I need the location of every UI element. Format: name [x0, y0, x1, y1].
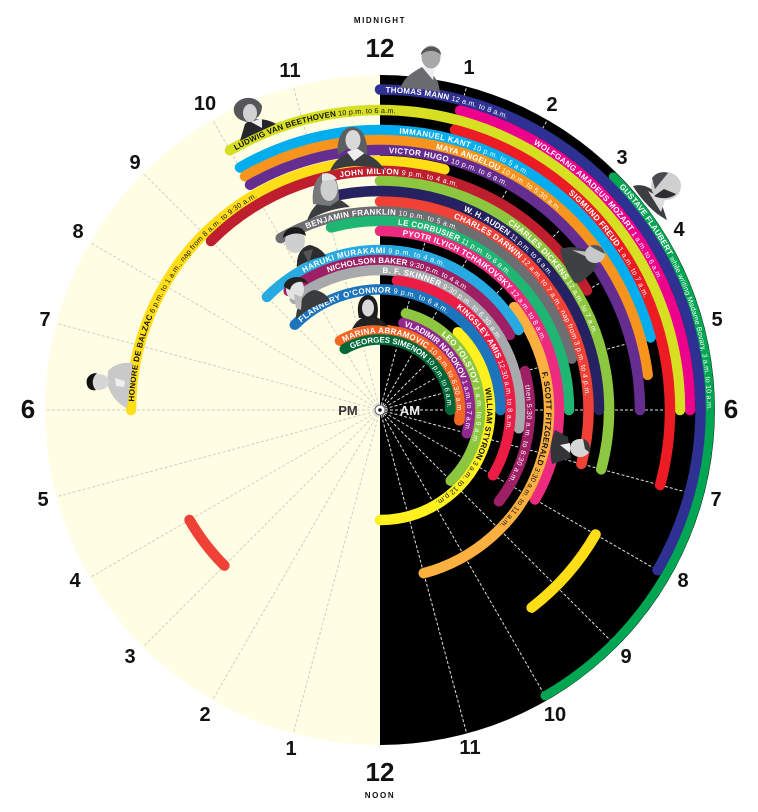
arc: Nicholson Baker second sleep: then 5:30 a.m. to 8:30 a.m.: [509, 384, 532, 481]
clock face: AM half: [380, 75, 715, 745]
arc: Le Corbusier: LE CORBUSIER 11 p.m. to 6 a.m.: [398, 219, 508, 275]
hour labels: 8: [72, 221, 84, 243]
arc: Kingsley Amis: [392, 275, 516, 480]
arc: Nicholson Baker: NICHOLSON BAKER 9:30 p.m. to 4 a.m.: [326, 258, 466, 290]
hour labels: 4: [673, 219, 685, 241]
arc: Immanuel Kant: IMMANUEL KANT 10 p.m. to 5 a.m.: [400, 128, 527, 175]
hour labels: 9: [129, 152, 141, 174]
portrait: Marina Abramovic: [352, 295, 388, 329]
arc: F. Scott Fitzgerald: F. SCOTT FITZGERALD 3:30 a.m. to 11 a.m.: [500, 372, 552, 526]
hour labels: 9: [620, 646, 632, 668]
hour labels: 3: [616, 147, 628, 169]
hour labels: 6: [21, 394, 35, 424]
arc: Leo Tolstoy: LEO TOLSTOY 1 a.m. to 9 a.m.: [442, 330, 482, 442]
portrait: Flannery O'Connor: [284, 277, 330, 319]
portrait: Thomas Mann: [401, 46, 441, 92]
portrait: Haruki Murakami: [283, 227, 326, 267]
arc: Benjamin Franklin: [276, 206, 577, 364]
hour labels: 5: [711, 309, 723, 331]
arc: Haruki Murakami: HARUKI MURAKAMI 9 p.m. to 4 a.m.: [302, 248, 444, 272]
arc: F. Scott Fitzgerald: [418, 302, 554, 578]
arc: B. F. Skinner: [290, 264, 526, 434]
arc: Georges Simenon: GEORGES SIMENON 10 p.m. to 6 a.m.: [350, 336, 452, 407]
hour labels: 8: [677, 570, 689, 592]
arc: Wolfgang Amadeus Mozart: [454, 105, 696, 416]
arc: William Styron: WILLIAM STYRON 3 a.m. to 12 p.m.: [436, 387, 493, 503]
portrait: Honoré de Balzac: [87, 363, 133, 408]
heading: noon: NOON: [365, 791, 395, 800]
portrait: F. Scott Fitzgerald: [551, 430, 590, 464]
arc: Immanuel Kant: [234, 124, 656, 343]
arc: Leo Tolstoy: [400, 308, 486, 486]
portrait: Charles Dickens: [560, 245, 605, 283]
arc: Honoré de Balzac: [126, 156, 450, 416]
arc: Sigmund Freud: [450, 124, 676, 490]
hour labels: 10: [544, 704, 566, 726]
arc: B. F. Skinner: B. F. SKINNER 9:30 p.m. to 6:30 a.m.: [382, 268, 500, 340]
arc: Victor Hugo: [244, 144, 646, 416]
hour labels: 12: [366, 757, 394, 787]
clock center: [375, 405, 385, 415]
arc: Thomas Mann: THOMAS MANN 12 a.m. to 8 a.m.: [386, 87, 506, 118]
hour labels: 12: [366, 33, 394, 63]
arc: Thomas Mann: [374, 84, 706, 576]
arc: Pyotr Ilyich Tchaikovsky: [374, 226, 564, 505]
hour labels: 7: [39, 309, 51, 331]
label: PM: PM: [338, 403, 358, 418]
arc: Vladimir Nabokov: VLADIMIR NABOKOV 1 a.m. to 7 a.m.: [406, 321, 472, 430]
arc: Darwin nap: [190, 520, 224, 566]
arc: Pyotr Ilyich Tchaikovsky: PYOTR ILYICH TCHAIKOVSKY 12 a.m. to 8 a.m.: [402, 230, 544, 340]
hour labels: 11: [459, 737, 481, 759]
arc: Gustave Flaubert: [540, 172, 714, 700]
arc: Sigmund Freud: SIGMUND FREUD 1 a.m. to 7 a.m.: [569, 190, 646, 298]
arc: Nicholson Baker second sleep: [494, 366, 536, 506]
hour labels: 11: [279, 60, 301, 82]
arc: John Milton: [206, 166, 592, 296]
arc: Balzac nap: [532, 534, 596, 608]
arc: Maya Angelou: [240, 134, 653, 380]
portrait: John Milton: [330, 127, 385, 171]
hour labels: 1: [463, 57, 475, 79]
hour labels: 1: [285, 738, 297, 760]
arc: Honoré de Balzac: HONORÉ DE BALZAC 6 p.m. to 1 a.m., nap from 8 a.m. to 9:30 a.m.: [128, 195, 256, 402]
arc: Maya Angelou: MAYA ANGELOU 10 p.m. to 5:30 a.m.: [436, 144, 559, 211]
arc: Charles Dickens: [374, 176, 614, 475]
arc: Kingsley Amis: KINGSLEY AMIS 12:30 a.m. to 8 a.m.: [456, 304, 512, 429]
portrait: Gustave Flaubert: [633, 172, 681, 220]
hour labels: 6: [724, 394, 738, 424]
arc: Ludwig van Beethoven: [224, 104, 686, 416]
arc: Le Corbusier: [326, 216, 574, 416]
arc: Haruki Murakami: [262, 244, 524, 336]
hour labels: 3: [124, 646, 136, 668]
arc: John Milton: JOHN MILTON 9 p.m. to 4 a.m.: [340, 168, 457, 187]
arc: Victor Hugo: VICTOR HUGO 10 p.m. to 6 a.m.: [389, 148, 506, 186]
portrait: Ludwig van Beethoven: [234, 98, 276, 141]
arc: W. H. Auden: [338, 186, 604, 416]
hour labels: 7: [710, 489, 722, 511]
arc: W. H. Auden: W. H. AUDEN 11 p.m. to 6 a.m.: [464, 206, 550, 276]
clock face: PM half: [45, 75, 380, 745]
arc: Benjamin Franklin: BENJAMIN FRANKLIN 10 p.m. to 5 a.m.: [305, 209, 456, 230]
portrait: Benjamin Franklin: [307, 173, 350, 221]
arc: Marina Abramovic: MARINA ABRAMOVIC 10 p.m. to 6:30 a.m.: [342, 328, 461, 412]
hour labels: 2: [546, 94, 558, 116]
arc: Wolfgang Amadeus Mozart: WOLFGANG AMADEUS MOZART 1 a.m. to 6 a.m.: [534, 139, 660, 280]
hour labels: 4: [69, 570, 81, 592]
hour labels: 5: [37, 489, 49, 511]
arc: William Styron: [374, 327, 496, 526]
arc: Charles Darwin: CHARLES DARWIN 12 a.m. to 7 a.m., nap from 3 p.m. to 4 p.m.: [454, 214, 589, 396]
arc: Charles Darwin: [374, 196, 594, 470]
hour labels: 10: [194, 93, 216, 115]
arc: Charles Dickens: CHARLES DICKENS 12 a.m. to 7 a.m.: [508, 220, 596, 334]
arc: Flannery O'Connor: [290, 284, 506, 416]
hour labels: 2: [199, 704, 211, 726]
heading: midnight: MIDNIGHT: [354, 16, 406, 25]
arc: Nicholson Baker: [283, 254, 516, 340]
label: AM: AM: [400, 403, 420, 418]
arc: Flannery O'Connor: FLANNERY O'CONNOR 9 p.m. to 6 a.m.: [298, 287, 447, 322]
arc: Ludwig van Beethoven: LUDWIG VAN BEETHOVEN 10 p.m. to 6 a.m.: [234, 108, 395, 150]
arc: Gustave Flaubert: GUSTAVE FLAUBERT while writing Madame Bovary, 3 a.m. to 10 a.m.: [620, 184, 712, 410]
